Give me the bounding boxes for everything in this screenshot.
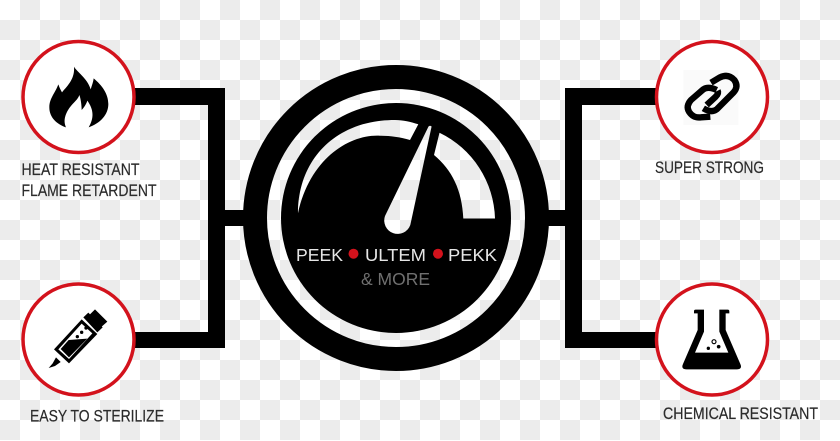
connector: right bracket (540, 88, 660, 348)
icon: chain link (683, 70, 738, 125)
text: easy to sterilize: EASY TO STERILIZE (30, 408, 164, 426)
red dot (433, 249, 443, 259)
label: ULTEM: ULTEM (365, 245, 426, 265)
icon: syringe (49, 309, 107, 368)
text: heat resistant flame retardent (22, 161, 156, 200)
gauge needle (384, 126, 432, 234)
badge: chemical resistant (656, 284, 768, 395)
central gauge (255, 77, 537, 359)
text: heat resistant flame retardent: FLAME RETARDENT (22, 182, 156, 200)
text: heat resistant flame retardent: HEAT RESISTANT (22, 161, 140, 179)
label: PEEK: PEEK (296, 245, 343, 265)
badge: easy to sterilize (23, 284, 134, 395)
icon: flask (682, 309, 741, 369)
gauge left arc (298, 120, 418, 213)
gauge outer ring (255, 77, 537, 359)
badge: super strong (656, 42, 768, 152)
label: PEKK: PEKK (448, 245, 497, 265)
icon: flame (49, 67, 108, 127)
gauge inner disc (281, 103, 511, 333)
badge: heat resistant (23, 42, 134, 152)
badge circle (656, 284, 768, 395)
red dot (348, 249, 358, 259)
label: and more: & MORE (361, 269, 430, 289)
connector: left bracket (130, 88, 250, 348)
text: chemical resistant: CHEMICAL RESISTANT (663, 405, 818, 423)
text: super strong: SUPER STRONG (655, 159, 764, 177)
badge circle (656, 42, 768, 152)
badge circle (23, 42, 134, 152)
badge circle (23, 284, 134, 395)
gauge right arc (434, 133, 495, 218)
